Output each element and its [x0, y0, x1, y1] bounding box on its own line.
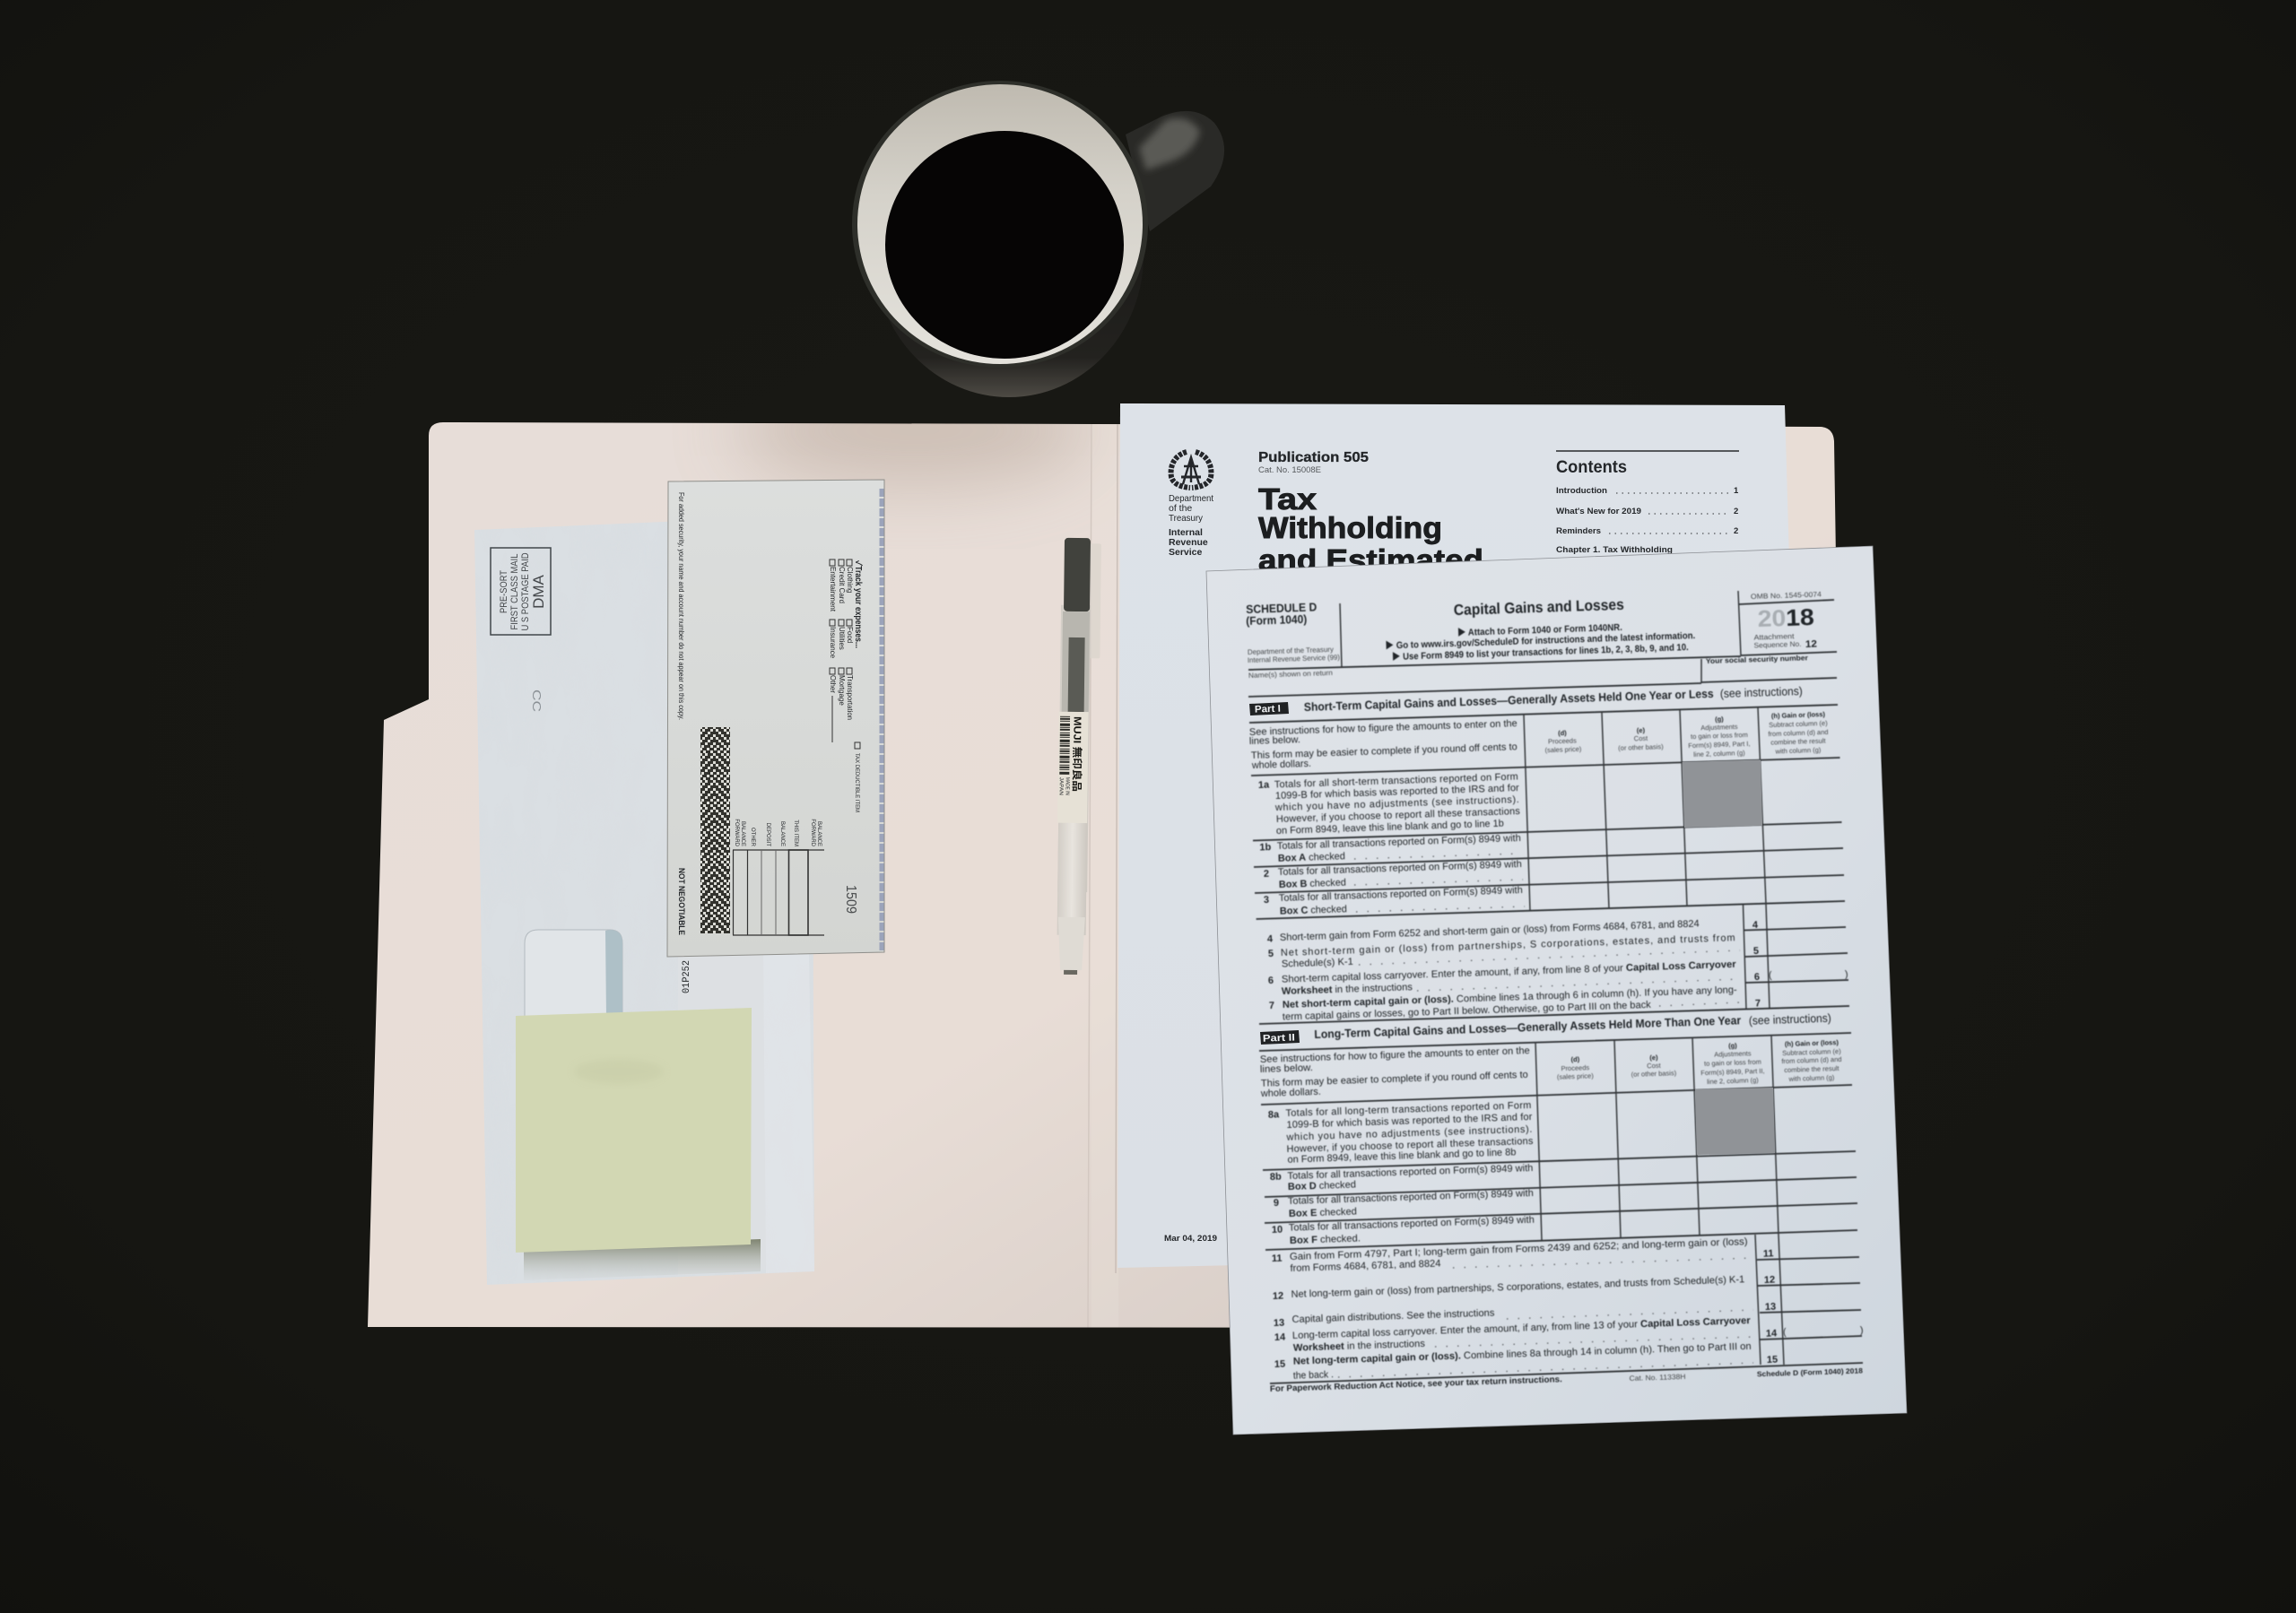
Part II lines 11 to 15: 14 [1274, 1332, 1286, 1343]
Part I column headers: with column (g) [1774, 746, 1822, 755]
Part I column headers: Subtract column (e) [1769, 719, 1828, 729]
Part II column headers: with column (g) [1787, 1073, 1835, 1083]
form rules [1248, 591, 1863, 1383]
Part II lines 11 to 15: the back . [1293, 1369, 1334, 1382]
track your expenses checklist: Other [829, 675, 837, 693]
Part II lines 11 to 15: Worksheet in the instructions [1293, 1339, 1426, 1354]
Part II column headers: to gain or loss from [1704, 1058, 1761, 1068]
Part II lines 11 to 15: Gain from Form 4797, Part I; long-term gain from Forms 2439 and 6252; and long-term gain or (loss) [1290, 1236, 1748, 1262]
postage box: U S POSTAGE PAID [520, 552, 531, 631]
track your expenses checklist: Food [846, 627, 854, 643]
coffee surface [885, 131, 1124, 359]
Part I lines 4 to 7: 4 [1752, 920, 1759, 931]
Part I lines 1a to 3: 3 [1264, 895, 1269, 906]
Part II column headers: (g) [1728, 1042, 1737, 1050]
form header [1246, 590, 1822, 680]
track your expenses checklist: Credit Card [838, 567, 846, 603]
Part I lines 1a to 3: Totals for all short-term transactions reported on Form [1274, 771, 1518, 790]
Part II lines 8a to 10: However, if you choose to report all these transactions [1286, 1136, 1534, 1155]
sticky note [516, 1008, 761, 1280]
track your expenses checklist: ✓Track your expenses... [853, 560, 863, 648]
Part II lines 11 to 15: from Forms 4684, 6781, and 8824 [1290, 1258, 1441, 1274]
Part II lines 11 to 15: Net long-term capital gain or (loss). Combine lines 8a through 14 in column (h). Then go to Part III on [1293, 1341, 1752, 1367]
tax deductible checkbox: TAX DEDUCTIBLE ITEM [854, 753, 859, 812]
balance grid: DEPOSIT [765, 823, 770, 846]
Part I lines 4 to 7: Net short-term capital gain or (loss). Combine lines 1a through 6 in column (h). If you have any long- [1283, 984, 1737, 1010]
Part II column headers: Adjustments [1714, 1049, 1752, 1059]
form footer: For Paperwork Reduction Act Notice, see your tax return instructions. [1270, 1375, 1562, 1394]
envelope address window [525, 930, 622, 1022]
treasury text: Department [1169, 493, 1213, 504]
Part I column headers: combine the result [1770, 737, 1827, 747]
Part I column headers: Adjustments [1700, 723, 1738, 732]
Part II label: Part II [1263, 1033, 1295, 1045]
contents list [1556, 451, 1739, 554]
pen cap [1064, 538, 1091, 611]
treasury text [1169, 493, 1213, 558]
Part II lines 8a to 10 [1268, 1100, 1535, 1246]
Part II column headers: (h) Gain or (loss) [1785, 1038, 1839, 1048]
ink refill [1068, 637, 1085, 712]
Part I column headers: (d) [1558, 729, 1567, 737]
balance grid: FORWARD [734, 819, 739, 847]
translucent section [1062, 611, 1090, 712]
Part II column headers: Proceeds [1561, 1063, 1590, 1072]
Part I lines 1a to 3: However, if you choose to report all these transactions [1276, 806, 1520, 825]
Part II heading: Long-Term Capital Gains and Losses—Generally Assets Held More Than One Year [1314, 1013, 1741, 1041]
Part I lines 4 to 7: Net short-term gain or (loss) from partnerships, S corporations, estates, and trusts from [1281, 932, 1735, 958]
treasury text: of the [1169, 503, 1192, 514]
shaded cell part II [1695, 1088, 1775, 1155]
Part II lines 11 to 15 [1272, 1236, 1864, 1382]
Part II column headers [1557, 1038, 1842, 1086]
Part I lines 1a to 3: 1099-B for which basis was reported to the IRS and for [1275, 783, 1519, 802]
Part II column headers: Cost [1647, 1062, 1662, 1070]
balance grid: BALANCE [740, 821, 745, 846]
Part II lines 11 to 15: ( [1783, 1327, 1787, 1338]
window envelope [474, 516, 815, 1287]
Part I lines 4 to 7: term capital gains or losses, go to Part II below. Otherwise, go to Part III on the back [1283, 1000, 1651, 1022]
contents list: Chapter 1. Tax Withholding [1556, 545, 1673, 554]
Part II instructions: See instructions for how to figure the amounts to enter on the [1260, 1045, 1530, 1065]
Part I lines 4 to 7: ( [1769, 970, 1772, 981]
Part I lines 4 to 7 [1267, 918, 1848, 1022]
Part II lines 11 to 15: 12 [1273, 1291, 1283, 1302]
treasury text: Service [1169, 547, 1203, 558]
form header: Name(s) shown on return [1248, 669, 1333, 680]
track your expenses checklist: Entertainment [829, 567, 837, 612]
form header: 2018 [1757, 603, 1814, 632]
contents list: 2 [1734, 507, 1738, 516]
check number: 1509 [843, 885, 858, 914]
Part II lines 11 to 15: 11 [1763, 1248, 1774, 1260]
contents list: 2 [1734, 526, 1738, 536]
treasury text: Internal [1169, 527, 1203, 538]
Part II lines 8a to 10: Totals for all transactions reported on Form(s) 8949 with [1287, 1163, 1534, 1182]
Part II column headers: (d) [1570, 1055, 1580, 1063]
check register stub [667, 480, 884, 957]
form header: 12 [1805, 639, 1817, 650]
Part II lines 11 to 15: 12 [1764, 1275, 1775, 1286]
Part II column headers: (or other basis) [1631, 1069, 1677, 1079]
publication date: Mar 04, 2019 [1164, 1234, 1217, 1243]
balance grid: FORWARD [810, 819, 815, 847]
Part I lines 1a to 3: on Form 8949, leave this line blank and go to line 1b [1276, 819, 1504, 837]
envelope inner panel [678, 953, 766, 1275]
form header: Capital Gains and Losses [1454, 596, 1624, 619]
form footer: Schedule D (Form 1040) 2018 [1757, 1366, 1864, 1378]
Part II lines 8a to 10: Totals for all transactions reported on Form(s) 8949 with [1288, 1188, 1534, 1207]
Part I column headers: Form(s) 8949, Part I, [1688, 740, 1751, 750]
Part I lines 1a to 3: Box A checked [1278, 851, 1345, 864]
shaded cell part I [1683, 760, 1762, 828]
contents list: Contents [1556, 458, 1627, 477]
Part I lines 1a to 3: Box B checked [1279, 878, 1346, 890]
grip section [1057, 917, 1085, 970]
Part I lines 1a to 3 [1258, 771, 1523, 917]
track your expenses checklist: Transportation [846, 675, 854, 720]
form footer: Cat. No. 11338H [1629, 1373, 1686, 1383]
Part II lines 11 to 15: 13 [1274, 1318, 1284, 1329]
Part II instructions [1260, 1045, 1530, 1099]
Publication 505 sheet [1118, 403, 1790, 1268]
treasury text: Treasury [1169, 513, 1204, 524]
Part II column headers: (e) [1649, 1054, 1658, 1062]
Part I instructions: whole dollars. [1251, 759, 1311, 771]
pen label: MADE IN [1064, 777, 1070, 795]
Part I lines 4 to 7: 5 [1268, 949, 1274, 959]
envelope printed serial: 01P252 [682, 960, 692, 993]
postage box [491, 548, 551, 635]
Part II instructions: whole dollars. [1260, 1087, 1321, 1099]
Part I lines 1a to 3: Totals for all transactions reported on Form(s) 8949 with [1279, 885, 1523, 904]
Part II column headers: Form(s) 8949, Part II, [1700, 1067, 1765, 1077]
Part I column headers: (sales price) [1544, 745, 1582, 754]
track your expenses checklist: Utilities [838, 627, 846, 650]
Part II lines 8a to 10: Box F checked. [1290, 1233, 1361, 1246]
mug handle [1126, 111, 1224, 231]
publication title: Tax [1258, 482, 1318, 516]
coffee mug [852, 81, 1224, 397]
Part I lines 1a to 3: Box C checked [1280, 904, 1347, 917]
form header: Department of the Treasury [1248, 646, 1334, 656]
Part II lines 11 to 15: Net long-term gain or (loss) from partnerships, S corporations, estates, and trusts from Schedule(s) K-1 [1291, 1274, 1744, 1300]
Part I column headers: to gain or loss from [1691, 731, 1748, 741]
catalog number: Cat. No. 15008E [1258, 465, 1321, 475]
postage box: PRE-SORT [499, 570, 509, 613]
Part II label [1260, 1030, 1300, 1045]
Part I column headers: line 2, column (g) [1693, 749, 1745, 759]
pen barcode [1059, 716, 1070, 775]
Part II column headers: line 2, column (g) [1707, 1076, 1759, 1086]
mug ceramic interior [857, 84, 1143, 364]
Part I lines 1a to 3: 2 [1264, 869, 1269, 880]
form footer [1270, 1366, 1864, 1394]
postage box: DMA [530, 574, 547, 609]
mug body [874, 114, 1144, 397]
Part I lines 4 to 7: Short-term capital loss carryover. Enter the amount, if any, from line 8 of your Capital Loss Carryover [1282, 959, 1737, 985]
contents list: Introduction [1556, 486, 1607, 495]
Part II lines 11 to 15: 13 [1765, 1302, 1776, 1313]
2D barcode [700, 727, 730, 933]
balance grid [733, 819, 824, 935]
envelope flap strip [763, 953, 814, 1273]
Part II instructions: This form may be easier to complete if you round off cents to [1261, 1070, 1528, 1089]
Schedule D sheet [1206, 546, 1907, 1435]
form header: ▶ Use Form 8949 to list your transactions for lines 1b, 2, 3, 8b, 9, and 10. [1392, 642, 1689, 663]
form header: (Form 1040) [1246, 612, 1307, 628]
Part I column headers: (e) [1637, 726, 1646, 734]
balance grid: BALANCE [816, 821, 822, 846]
gel pen [1056, 538, 1101, 975]
balance grid: BALANCE [779, 821, 785, 846]
publication number: Publication 505 [1258, 450, 1369, 465]
pen label [1057, 712, 1089, 823]
publication title: and Estimated [1258, 543, 1483, 577]
sticky note shadow [524, 1239, 761, 1280]
Part II lines 11 to 15: 11 [1272, 1253, 1283, 1264]
Part I lines 4 to 7: Short-term gain from Form 6252 and short-term gain or (loss) from Forms 4684, 6781, and 8824 [1280, 918, 1700, 943]
Part I lines 4 to 7: ) [1845, 969, 1848, 980]
Part II lines 8a to 10: Box D checked [1288, 1179, 1356, 1192]
Part II lines 8a to 10: which you have no adjustments (see instructions). [1285, 1124, 1533, 1143]
Part II lines 8a to 10: 9 [1274, 1198, 1279, 1209]
Part I lines 4 to 7: 6 [1268, 976, 1274, 986]
Part I lines 4 to 7: 5 [1753, 946, 1759, 957]
Part I label [1249, 702, 1289, 715]
Part II lines 11 to 15: 15 [1767, 1355, 1778, 1366]
Part I lines 1a to 3: 1b [1259, 842, 1272, 853]
pen label: MUJI 無印良品 [1071, 716, 1084, 792]
Part I heading: Short-Term Capital Gains and Losses—Generally Assets Held One Year or Less [1304, 687, 1714, 714]
form text [1246, 590, 1864, 1394]
Part I column headers: (h) Gain or (loss) [1771, 710, 1826, 720]
sheet paper [1206, 546, 1907, 1435]
Part II lines 11 to 15: 14 [1766, 1328, 1778, 1340]
Part II lines 8a to 10: Box E checked [1289, 1206, 1357, 1219]
Part II lines 8a to 10: Totals for all transactions reported on Form(s) 8949 with [1289, 1215, 1535, 1234]
form header: OMB No. 1545-0074 [1751, 590, 1822, 601]
Part II lines 8a to 10: 8b [1270, 1172, 1282, 1183]
form header: SCHEDULE D [1246, 600, 1317, 616]
Part I lines 4 to 7: 6 [1754, 972, 1760, 983]
pen clip [1089, 543, 1101, 658]
treasury text: Revenue [1169, 537, 1208, 548]
track your expenses checklist: Mortgage [838, 675, 846, 706]
Part II column headers: combine the result [1784, 1064, 1840, 1074]
Part I column headers [1544, 710, 1829, 759]
Part II lines 8a to 10: 10 [1272, 1225, 1283, 1236]
Part I lines 1a to 3: which you have no adjustments (see instructions). [1274, 794, 1519, 813]
contents list: 1 [1734, 486, 1739, 496]
track your expenses checklist: Clothing [846, 567, 854, 593]
Part II lines 11 to 15: Capital gain distributions. See the instructions [1292, 1307, 1495, 1325]
Part I instructions: This form may be easier to complete if you round off cents to [1251, 741, 1518, 761]
Part I instructions: lines below. [1249, 734, 1300, 747]
Part I lines 1a to 3: 1a [1258, 780, 1270, 791]
Part I column headers: from column (d) and [1768, 728, 1829, 738]
form header: ▶ Go to www.irs.gov/ScheduleD for instructions and the latest information. [1385, 630, 1695, 651]
form header: Internal Revenue Service (99) [1248, 654, 1340, 664]
Part I column headers: Proceeds [1548, 736, 1577, 746]
Part I instructions [1249, 718, 1518, 771]
pen label: JAPAN [1057, 777, 1064, 795]
Part I heading: (see instructions) [1720, 684, 1803, 700]
mug rim [852, 81, 1148, 368]
Part I lines 4 to 7: 7 [1269, 1001, 1274, 1011]
lower barrel [1057, 823, 1087, 935]
form header: Your social security number [1706, 654, 1808, 665]
security notice: For added security, your name and account number do not appear on this copy. [677, 492, 685, 720]
perforated blue edge [879, 489, 884, 950]
Part II column headers: from column (d) and [1781, 1055, 1842, 1065]
Part II heading: (see instructions) [1749, 1011, 1831, 1028]
Part II lines 8a to 10: 1099-B for which basis was reported to the IRS and for [1286, 1112, 1533, 1131]
Part I label: Part I [1255, 704, 1281, 715]
publication title [1258, 482, 1483, 577]
Part II lines 8a to 10: Totals for all long-term transactions reported on Form [1285, 1100, 1532, 1119]
Part I lines 1a to 3: Totals for all transactions reported on Form(s) 8949 with [1278, 859, 1522, 878]
Part II lines 11 to 15: Long-term capital loss carryover. Enter the amount, if any, from line 13 of your Capital Loss Carryover [1292, 1315, 1752, 1341]
Part II lines 8a to 10: on Form 8949, leave this line blank and go to line 8b [1287, 1147, 1517, 1166]
Part II lines 8a to 10: 8a [1268, 1109, 1280, 1121]
contents list: Reminders [1556, 526, 1601, 535]
contents list: What's New for 2019 [1556, 507, 1641, 516]
manila folder [368, 377, 1848, 1330]
Part I column headers: (g) [1715, 715, 1724, 724]
balance grid: THIS ITEM [793, 820, 798, 846]
Part I lines 1a to 3: Totals for all transactions reported on Form(s) 8949 with [1277, 833, 1521, 852]
track your expenses checklist [829, 559, 863, 742]
IRS eagle logo [1171, 452, 1211, 488]
form header: ▶ Attach to Form 1040 or Form 1040NR. [1457, 622, 1622, 638]
Part I column headers: Cost [1634, 734, 1648, 742]
Part I lines 4 to 7: Worksheet in the instructions [1282, 982, 1413, 997]
form header: Attachment [1753, 632, 1796, 642]
Part II column headers: Subtract column (e) [1782, 1047, 1841, 1057]
Part II lines 11 to 15: 15 [1274, 1359, 1285, 1370]
Part I lines 4 to 7: 4 [1267, 933, 1274, 945]
Part I lines 4 to 7: 7 [1755, 998, 1761, 1009]
postage box: FIRST CLASS MAIL [509, 554, 520, 629]
Part I column headers: (or other basis) [1618, 742, 1664, 752]
track your expenses checklist: Insurance [829, 627, 837, 659]
balance grid: OTHER [750, 828, 755, 847]
form header: Sequence No. [1753, 640, 1802, 649]
Part II instructions: lines below. [1260, 1062, 1313, 1075]
envelope CC mark: CC [530, 689, 544, 712]
publication title: Withholding [1258, 511, 1442, 544]
Part I lines 4 to 7: Schedule(s) K-1 [1282, 957, 1353, 969]
Part II lines 11 to 15: ) [1860, 1325, 1864, 1336]
Part I instructions: See instructions for how to figure the amounts to enter on the [1249, 718, 1518, 738]
not negotiable label: NOT NEGOTIABLE [677, 868, 686, 935]
Part II column headers: (sales price) [1557, 1071, 1594, 1081]
pen barrel [1057, 605, 1091, 892]
pen tip [1064, 970, 1077, 975]
